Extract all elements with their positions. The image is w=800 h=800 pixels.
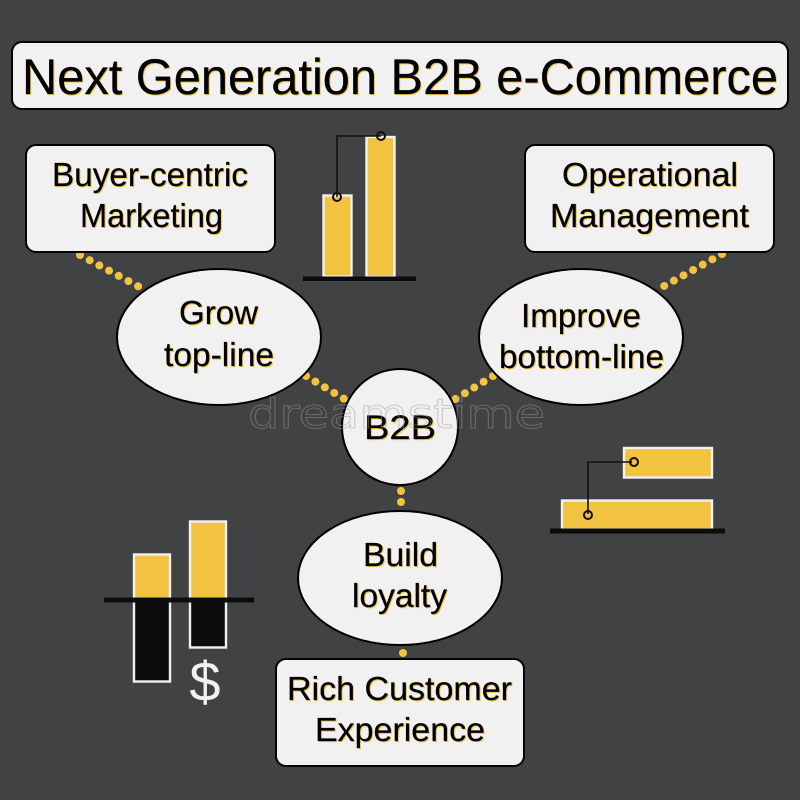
chart: revenue and cost bars with dollar sign: $ (189, 650, 221, 713)
bubble: improve bottom-line: Improve (521, 297, 641, 334)
chart: horizontal bars (550, 448, 725, 534)
watermark: dreamstime (248, 390, 545, 438)
connector: B2B to build loyalty (397, 491, 405, 510)
panel: rich customer experience (276, 659, 524, 766)
bubble: B2B hub: B2B (364, 409, 436, 447)
bubble: grow top-line: Grow (179, 294, 258, 331)
panel: operational management (525, 145, 774, 252)
title: Next Generation B2B e-Commerce (22, 49, 778, 105)
connector: improve to B2B (454, 376, 493, 400)
bubble: build loyalty: loyalty (352, 577, 447, 614)
panel: buyer-centric marketing: Marketing (80, 197, 223, 234)
bubble: grow top-line (117, 269, 321, 405)
bubble: build loyalty: Build (363, 536, 438, 573)
panel: operational management: Management (550, 197, 749, 234)
chart: revenue and cost bars with dollar sign (104, 522, 254, 713)
panel: buyer-centric marketing (26, 145, 275, 252)
chart: rising vertical bars (303, 132, 416, 281)
panel: rich customer experience: Experience (315, 711, 485, 748)
bubble: improve bottom-line: bottom-line (499, 338, 664, 375)
panel: rich customer experience: Rich Customer (287, 670, 512, 707)
connector: build loyalty to rich experience (399, 653, 407, 654)
connector: operational to improve (657, 254, 722, 290)
connector: grow to B2B (306, 376, 346, 400)
panel: buyer-centric marketing: Buyer-centric (52, 156, 248, 193)
bubble: grow top-line: top-line (164, 336, 274, 373)
bubble: B2B hub (342, 369, 458, 485)
bubble: build loyalty (298, 511, 502, 645)
panel: operational management: Operational (562, 156, 738, 193)
connector: marketing to grow (80, 255, 145, 290)
bubble: improve bottom-line (479, 269, 683, 405)
